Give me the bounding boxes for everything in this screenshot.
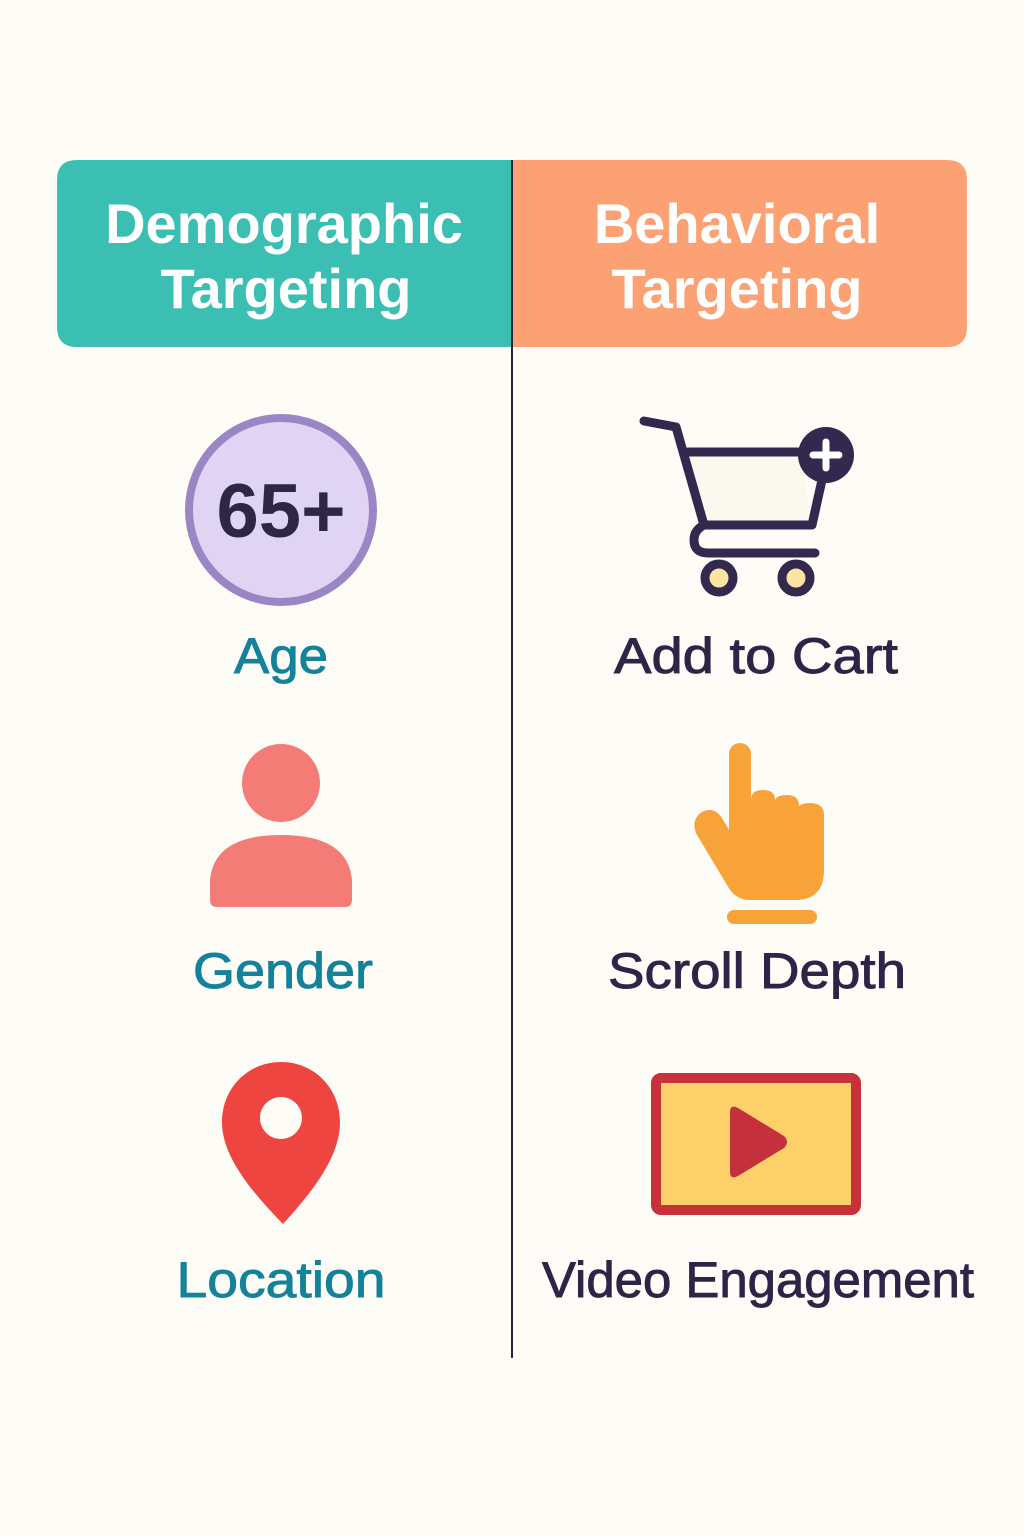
header: behavioral targeting: Behavioral <box>594 192 880 255</box>
icon: location pin <box>222 1062 340 1224</box>
label: age: Age <box>234 628 328 684</box>
icon: person <box>210 744 352 907</box>
label: location: Location <box>176 1252 386 1308</box>
icon: video player <box>656 1078 856 1210</box>
icon: shopping cart with plus <box>644 421 854 592</box>
label: video engagement: Video Engagement <box>542 1252 974 1308</box>
header: demographic targeting: Demographic <box>105 192 463 255</box>
icon: age 65+ badge <box>189 418 373 602</box>
label: scroll depth: Scroll Depth <box>608 943 906 999</box>
icon: age 65+ badge: 65+ <box>217 469 345 554</box>
header: demographic targeting <box>57 160 512 347</box>
label: add to cart: Add to Cart <box>614 628 898 684</box>
header: demographic targeting: Targeting <box>161 257 411 320</box>
header: behavioral targeting <box>512 160 967 347</box>
header: behavioral targeting: Targeting <box>612 257 862 320</box>
icon: pointing hand <box>694 743 824 924</box>
label: gender: Gender <box>193 943 373 999</box>
